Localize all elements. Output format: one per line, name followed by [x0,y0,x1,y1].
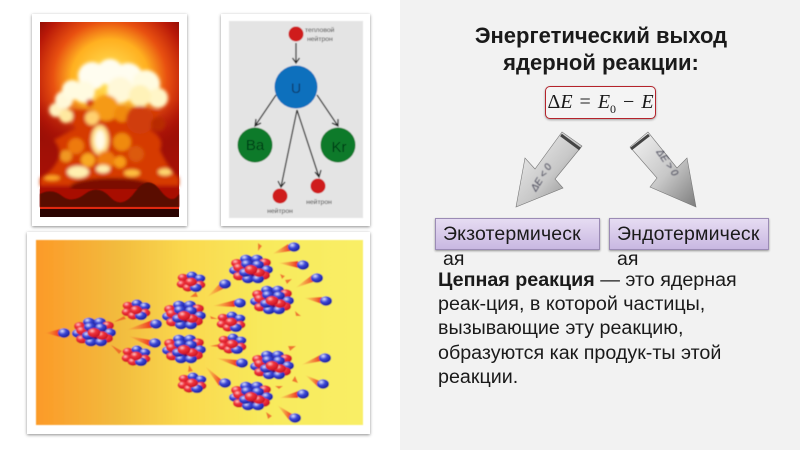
text: ая [617,248,638,270]
chain reaction picture [36,240,363,425]
heading: Энергетический выход [475,23,727,48]
definition text: реакции. [438,366,518,388]
definition text [438,269,737,388]
neutron left: нейтрон [267,207,293,215]
label: exothermic [435,218,600,250]
label: endothermic [609,218,769,250]
definition text: реак-ция, в которой частицы, [438,293,705,315]
uranium nucleus: U [291,80,301,96]
definition text: образуются как продук-ты этой [438,342,721,364]
definition text: вызывающие эту реакцию, [438,317,684,339]
arrow: exothermic [516,132,582,207]
fission diagram [229,21,363,218]
barium nucleus: Ba [246,137,265,154]
picture frame: chain reaction [27,232,370,434]
label: exothermic: Экзотермическ [443,223,581,245]
thermal neutron: нейтрон [307,35,333,43]
photo frame: explosion [32,14,187,226]
neutron right [306,178,332,206]
explosion photo [40,22,179,217]
heading [475,23,727,75]
label: endothermic: Эндотермическ [617,223,760,245]
uranium nucleus [274,66,318,108]
neutron tails [45,244,322,420]
neutron left [267,188,293,215]
nuclei [72,318,116,346]
arrow: endothermic: ΔE > 0 [653,147,680,179]
neutrons [58,328,70,338]
neutron right: нейтрон [306,198,332,206]
formula box: ΔE = E0 − E [547,91,654,116]
krypton nucleus: Kr [332,139,347,156]
heading: ядерной реакции: [503,50,699,75]
definition text: Цепная реакция — это ядерная [438,269,737,291]
arrow: endothermic [630,132,696,207]
arrow: exothermic: ΔE < 0 [529,162,555,194]
right panel background [400,0,800,450]
thermal neutron [288,26,335,43]
barium nucleus [238,128,272,162]
diagram frame: fission [221,14,370,226]
text: ая [443,248,464,270]
krypton nucleus [320,128,356,162]
thermal neutron: тепловой [305,26,335,34]
